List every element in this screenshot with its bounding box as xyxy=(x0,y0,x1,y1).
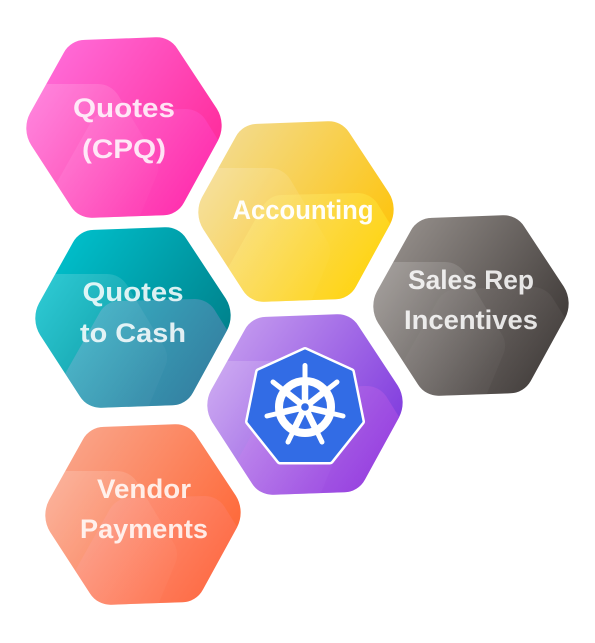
label: Accounting: Accounting xyxy=(232,195,374,225)
hexagon: Sales Rep Incentives xyxy=(373,215,569,396)
label: Quotes (CPQ): Quotes xyxy=(73,93,175,123)
icon: Kubernetes helm wheel xyxy=(249,351,361,460)
label: Sales Rep Incentives: Incentives xyxy=(404,305,538,335)
label: Quotes (CPQ): (CPQ) xyxy=(82,134,166,164)
hexagon: Quotes to Cash xyxy=(35,227,231,408)
hexagon: Vendor Payments xyxy=(45,424,241,605)
label: Quotes to Cash: Quotes xyxy=(82,277,184,307)
label: Sales Rep Incentives: Sales Rep xyxy=(408,265,534,295)
label: Quotes to Cash: to Cash xyxy=(80,318,186,348)
hexagon: Accounting xyxy=(198,121,394,302)
hexagon: Kubernetes xyxy=(207,314,403,495)
label: Vendor Payments: Vendor xyxy=(97,474,191,504)
hexagon: Quotes (CPQ) xyxy=(26,37,222,218)
label: Vendor Payments: Payments xyxy=(80,514,208,544)
